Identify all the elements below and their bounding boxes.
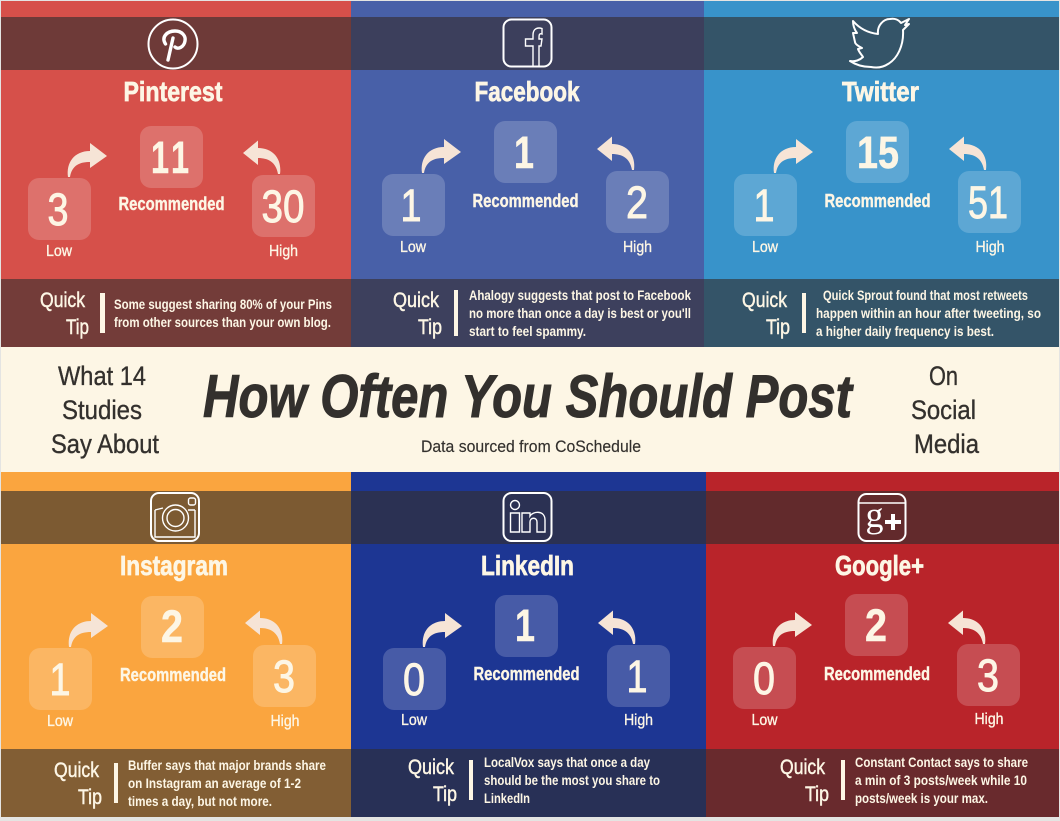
icon: Instagram bbox=[151, 493, 199, 541]
left tagline bbox=[51, 361, 159, 459]
icon: Twitter bbox=[850, 19, 909, 68]
chart: post frequency: 15 bbox=[857, 127, 899, 178]
right tagline: Social bbox=[911, 395, 976, 425]
chart: post frequency bbox=[28, 126, 315, 260]
quick tip: Quick bbox=[54, 759, 99, 782]
icon: LinkedIn bbox=[504, 493, 552, 541]
quick tip bbox=[393, 287, 691, 339]
heading: Instagram: Instagram bbox=[120, 550, 228, 581]
chart: post frequency bbox=[734, 121, 1021, 256]
quick tip: posts/week is your max. bbox=[855, 790, 988, 806]
right tagline: On bbox=[929, 361, 958, 391]
chart: post frequency: Low bbox=[47, 713, 73, 730]
chart: post frequency bbox=[29, 596, 316, 730]
quick tip: Quick bbox=[742, 289, 787, 312]
title band bbox=[1, 347, 1059, 472]
chart: post frequency: Recommended bbox=[472, 191, 578, 211]
chart: post frequency: High bbox=[623, 239, 652, 256]
quick tip bbox=[40, 289, 332, 339]
chart: post frequency: High bbox=[974, 711, 1004, 728]
left tagline: Say About bbox=[51, 429, 159, 459]
heading: Google+: Google+ bbox=[835, 550, 924, 581]
chart: post frequency: 3 bbox=[48, 184, 68, 235]
panel: Instagram bbox=[1, 472, 351, 817]
quick tip: times a day, but not more. bbox=[128, 793, 272, 809]
quick tip: Quick bbox=[780, 756, 825, 779]
right tagline bbox=[911, 361, 980, 459]
quick tip: on Instagram an average of 1-2 bbox=[128, 775, 301, 791]
quick tip: Constant Contact says to share bbox=[855, 754, 1028, 770]
quick tip: Buffer says that major brands share bbox=[128, 757, 326, 773]
chart: post frequency: 1 bbox=[171, 132, 189, 183]
chart: post frequency: 2 bbox=[161, 601, 183, 652]
chart: post frequency: High bbox=[976, 239, 1004, 256]
panel: LinkedIn bbox=[351, 472, 706, 817]
chart: post frequency: Low bbox=[752, 712, 778, 729]
chart: post frequency: Recommended bbox=[118, 194, 224, 214]
quick tip bbox=[408, 754, 660, 806]
title: How Often You Should Post bbox=[203, 363, 854, 430]
chart: post frequency: 51 bbox=[968, 177, 1008, 228]
quick tip: a min of 3 posts/week while 10 bbox=[855, 772, 1027, 788]
chart: post frequency bbox=[382, 121, 669, 256]
quick tip: start to feel spammy. bbox=[469, 323, 586, 339]
quick tip: Tip bbox=[433, 783, 457, 806]
chart: post frequency: 1 bbox=[50, 654, 70, 705]
left tagline: What 14 bbox=[58, 361, 146, 391]
chart: post frequency: Recommended bbox=[824, 664, 930, 684]
chart: post frequency: 0 bbox=[753, 653, 775, 704]
chart: post frequency: 1 bbox=[151, 132, 169, 183]
chart: post frequency: 2 bbox=[865, 600, 887, 651]
quick tip bbox=[742, 287, 1041, 339]
chart: post frequency: Low bbox=[401, 712, 427, 729]
chart: post frequency: 0 bbox=[403, 654, 425, 705]
quick tip: from other sources than your own blog. bbox=[114, 314, 331, 330]
chart: post frequency: Recommended bbox=[824, 191, 930, 211]
quick tip: Tip bbox=[66, 316, 89, 339]
chart: post frequency: 1 bbox=[515, 600, 535, 651]
chart: post frequency bbox=[383, 595, 670, 729]
icon: Google+: g bbox=[866, 495, 884, 535]
icon: Facebook bbox=[504, 20, 552, 66]
chart: post frequency: Recommended bbox=[474, 664, 580, 684]
chart: post frequency: High bbox=[269, 243, 298, 260]
quick tip: a higher daily frequency is best. bbox=[816, 323, 994, 339]
quick tip: Tip bbox=[805, 783, 829, 806]
heading: Facebook: Facebook bbox=[474, 76, 580, 107]
chart: post frequency: Low bbox=[400, 239, 426, 256]
chart: post frequency bbox=[733, 594, 1020, 729]
chart: post frequency: 1 bbox=[400, 180, 422, 231]
quick tip: LinkedIn bbox=[484, 790, 530, 806]
chart: post frequency: Low bbox=[46, 243, 72, 260]
heading: Pinterest: Pinterest bbox=[124, 76, 222, 107]
quick tip: Tip bbox=[766, 316, 790, 339]
chart: post frequency: High bbox=[624, 712, 653, 729]
right tagline: Media bbox=[914, 429, 980, 459]
quick tip: Quick bbox=[40, 289, 85, 312]
quick tip bbox=[54, 757, 326, 809]
left tagline: Studies bbox=[62, 395, 142, 425]
panel: Twitter bbox=[704, 1, 1059, 347]
quick tip: Quick bbox=[408, 756, 454, 779]
quick tip: Tip bbox=[78, 786, 102, 809]
quick tip: no more than once a day is best or you'll bbox=[469, 305, 691, 321]
heading: Twitter: Twitter bbox=[842, 76, 919, 107]
heading: LinkedIn: LinkedIn bbox=[481, 550, 574, 581]
chart: post frequency: 2 bbox=[626, 177, 648, 228]
chart: post frequency: 1 bbox=[626, 651, 648, 702]
chart: post frequency: Recommended bbox=[120, 665, 226, 685]
quick tip: Some suggest sharing 80% of your Pins bbox=[114, 296, 332, 312]
quick tip: should be the most you share to bbox=[484, 772, 660, 788]
quick tip: Ahalogy suggests that post to Facebook bbox=[469, 287, 691, 303]
panel: Pinterest bbox=[1, 1, 351, 347]
chart: post frequency: 1 bbox=[754, 180, 774, 231]
quick tip: LocalVox says that once a day bbox=[484, 754, 650, 770]
chart: post frequency: 1 bbox=[514, 127, 534, 178]
chart: post frequency: 3 bbox=[977, 650, 999, 701]
panel: Facebook bbox=[351, 1, 704, 347]
quick tip bbox=[780, 754, 1028, 806]
panel: Google+ bbox=[706, 472, 1059, 817]
icon: Google+ bbox=[858, 494, 906, 541]
chart: post frequency: 3 bbox=[273, 651, 295, 702]
chart: post frequency: Low bbox=[752, 239, 778, 256]
quick tip: Quick bbox=[393, 289, 439, 312]
quick tip: Tip bbox=[418, 316, 442, 339]
chart: post frequency: 30 bbox=[262, 181, 304, 232]
icon: Pinterest bbox=[148, 20, 198, 68]
subtitle: Data sourced from CoSchedule bbox=[421, 437, 641, 456]
chart: post frequency: High bbox=[270, 713, 300, 730]
